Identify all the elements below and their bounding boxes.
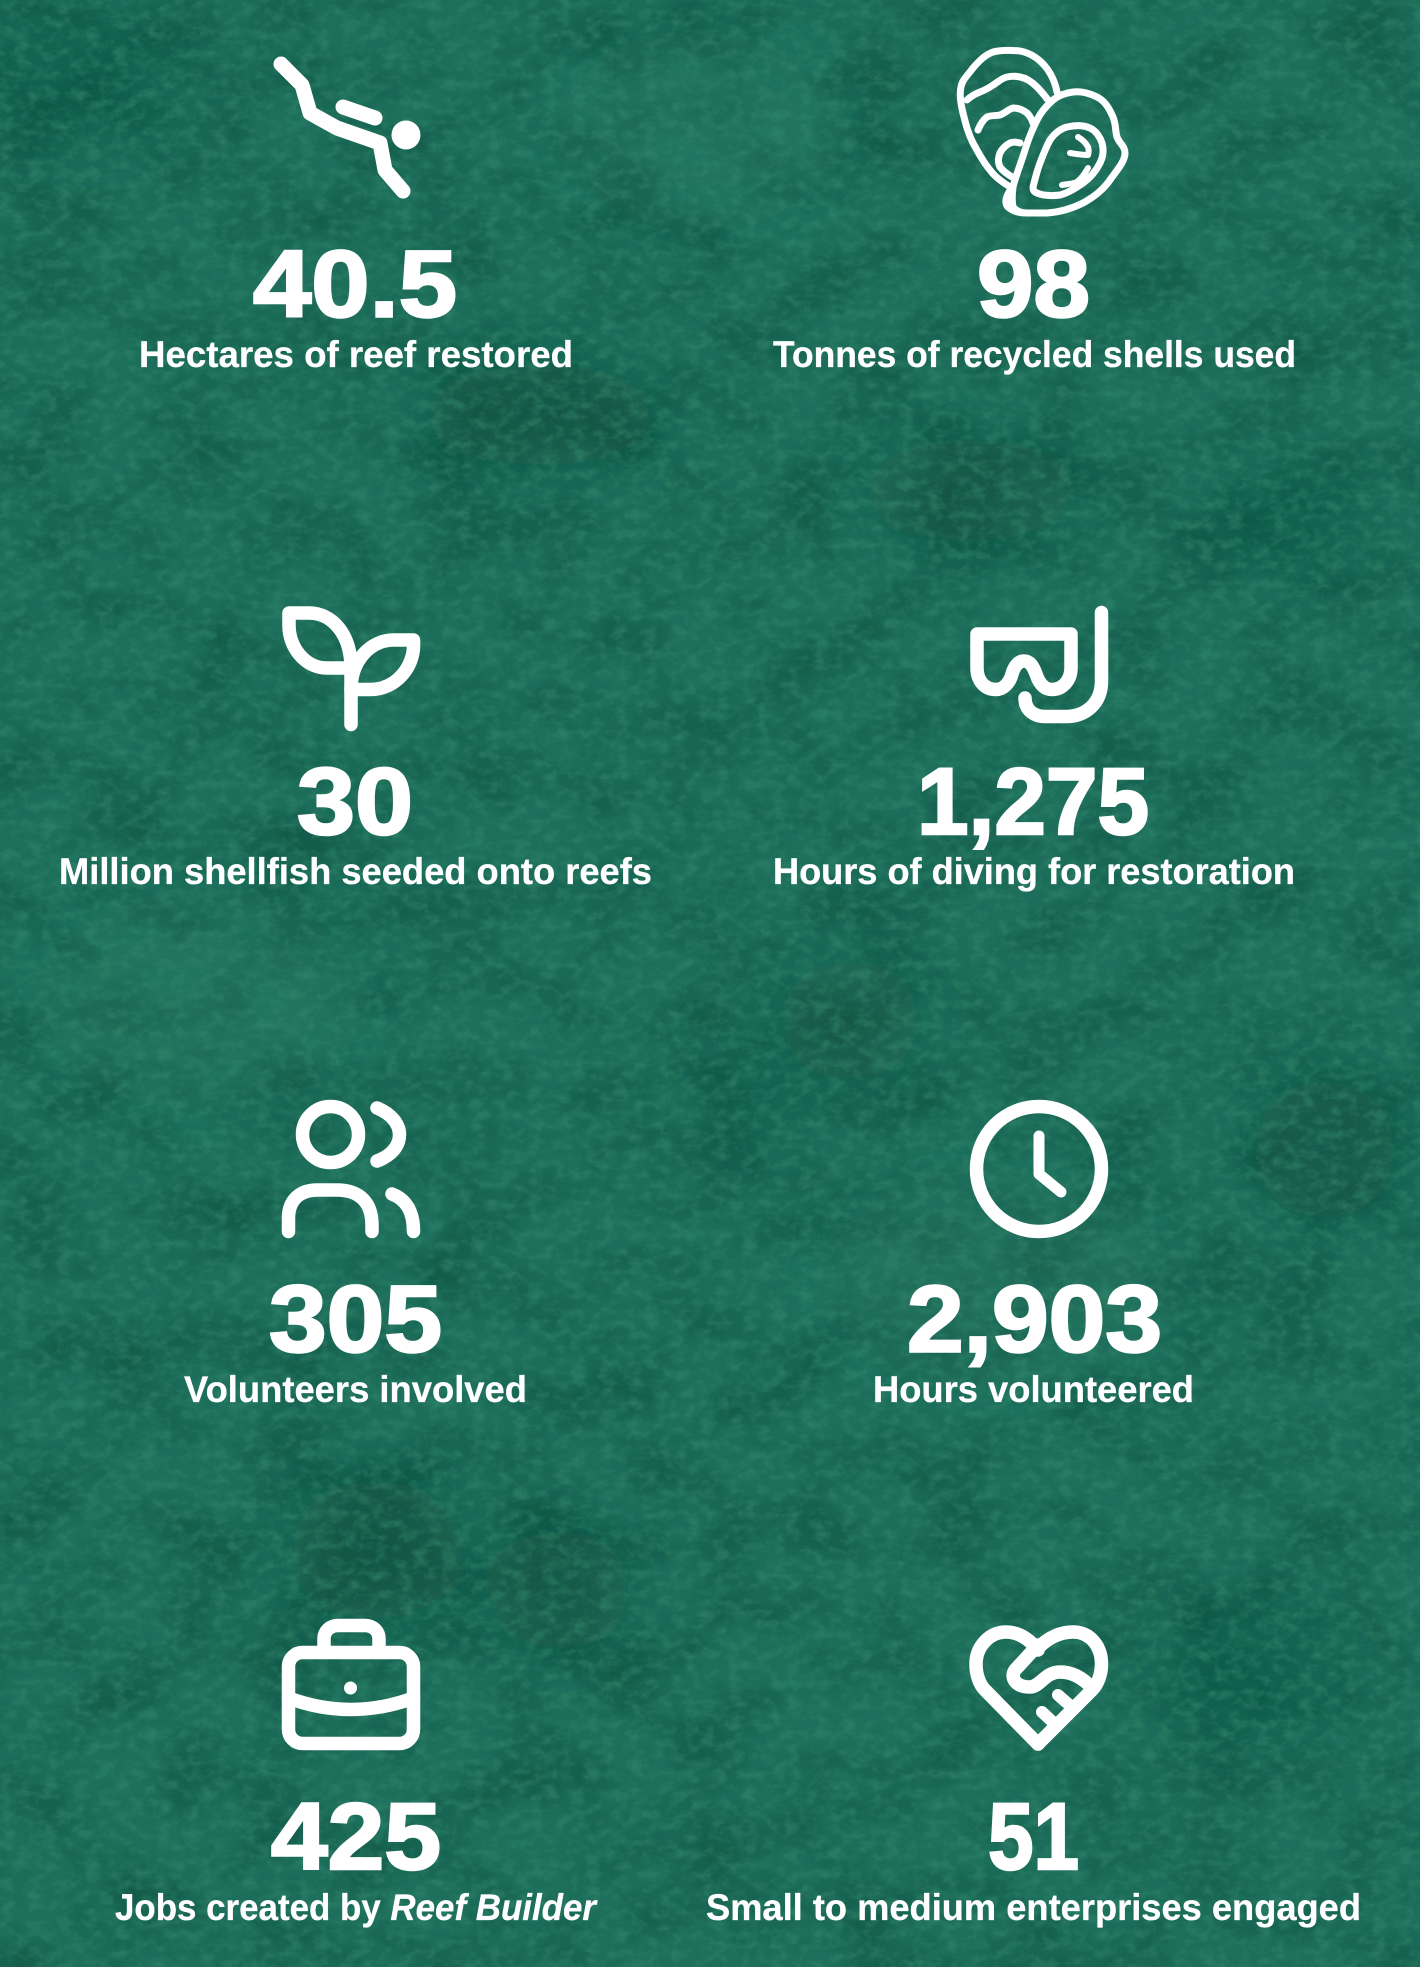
icon: snorkel mask [977,612,1102,716]
label: jobs: Jobs created by Reef Builder [115,1887,598,1928]
number: 1,275: 1,275 [917,749,1149,855]
panel: enterprises [706,1632,1361,1928]
label: hectares: Hectares of reef restored [139,334,573,375]
icon: briefcase [288,1626,414,1744]
number: 98: 98 [977,232,1090,338]
panel: hours volunteered [873,1106,1194,1410]
panel: recycled shells [773,50,1296,375]
label: diving: Hours of diving for restoration [773,851,1295,892]
number: 2,903: 2,903 [907,1266,1162,1372]
icon: oyster shells [960,50,1125,213]
icon: diver [281,64,420,191]
icon: clock [976,1106,1102,1232]
panel: hours diving [773,612,1295,892]
panel: hectares restored [139,64,573,375]
number: 30: 30 [297,749,413,855]
label: volunteers: Volunteers involved [184,1369,527,1410]
panel: volunteers [184,1106,527,1410]
icon: people [288,1106,414,1232]
number: 51: 51 [988,1784,1079,1890]
label: shells: Tonnes of recycled shells used [773,334,1296,375]
panel: shellfish seeded [59,613,652,892]
icon: sprout [289,613,414,724]
icon: heart handshake [976,1632,1102,1744]
label: shellfish: Million shellfish seeded onto reefs [59,851,652,892]
label: enterprises: Small to medium enterprises engaged [706,1887,1361,1928]
number: 40.5: 40.5 [253,232,457,338]
panel: jobs [115,1626,598,1928]
label: hours volunteered: Hours volunteered [873,1369,1194,1410]
number: 425: 425 [271,1784,441,1890]
number: 305: 305 [269,1266,442,1372]
